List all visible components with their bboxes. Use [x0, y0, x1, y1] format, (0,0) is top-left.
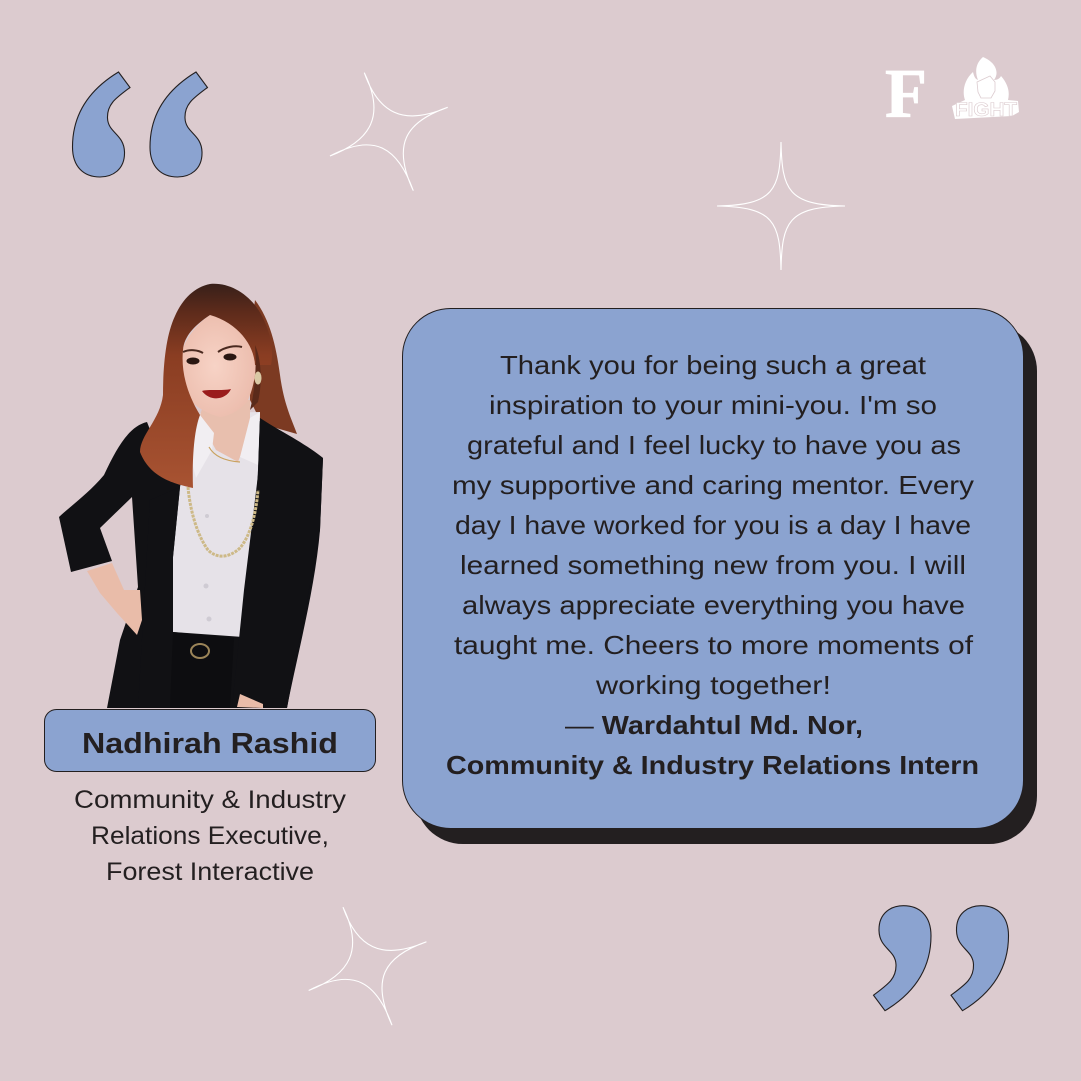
logo: FIGHT flame [952, 57, 1019, 121]
collar [190, 412, 260, 478]
icon: closing quotation mark [874, 906, 1008, 1011]
testimonial quote text: learned something new from you. I will [460, 550, 966, 580]
eyebrows [183, 346, 242, 353]
testimonial quote text: always appreciate everything you have [462, 590, 965, 620]
job title text [74, 786, 347, 886]
logo: Forest Interactive F: F [885, 56, 927, 132]
testimonial quote text [452, 350, 974, 700]
jacket right front panel [232, 418, 323, 708]
testimonial quote text: grateful and I feel lucky to have you as [467, 430, 961, 460]
forearm and hand [87, 563, 142, 635]
testimonial attribution [446, 710, 979, 780]
trousers and belt [170, 632, 234, 708]
testimonial attribution: — Wardahtul Md. Nor, [565, 710, 863, 740]
logo: FIGHT flame: FIGHT [955, 100, 1017, 121]
shirt [173, 412, 260, 637]
name badge [44, 710, 376, 772]
testimonial attribution: Community & Industry Relations Intern [446, 750, 979, 780]
portrait: Nadhirah Rashid [59, 284, 323, 708]
thin necklace [209, 447, 240, 462]
job title text: Community & Industry [74, 786, 347, 814]
testimonial quote text: inspiration to your mini-you. I'm so [489, 390, 937, 420]
icon: sparkle bottom [309, 907, 426, 1025]
panel: testimonial shadow [415, 323, 1037, 844]
shirt buttons [204, 514, 212, 622]
testimonial quote text: my supportive and caring mentor. Every [452, 470, 974, 500]
hair shadow beside face [250, 345, 261, 410]
job title text: Relations Executive, [91, 822, 329, 850]
name badge: Nadhirah Rashid [82, 728, 338, 760]
jacket [59, 420, 323, 708]
job title text: Forest Interactive [106, 858, 314, 886]
testimonial quote text: Thank you for being such a great [500, 350, 927, 380]
hand at hem [237, 694, 263, 708]
testimonial quote text: taught me. Cheers to more moments of [454, 630, 974, 660]
eyes [186, 354, 236, 364]
jacket left front panel [138, 487, 180, 708]
hair front [140, 284, 272, 488]
panel: testimonial card [402, 308, 1024, 828]
gold chain necklace [188, 487, 258, 556]
testimonial quote text: day I have worked for you is a day I have [455, 510, 971, 540]
lips [202, 389, 231, 398]
icon: sparkle top centre [330, 73, 448, 191]
neck [200, 400, 250, 462]
icon: opening quotation mark [72, 72, 208, 177]
hair back right [250, 300, 297, 434]
earring [254, 372, 262, 384]
face [181, 315, 256, 417]
testimonial quote text: working together! [595, 670, 831, 700]
icon: sparkle top right [717, 142, 845, 270]
